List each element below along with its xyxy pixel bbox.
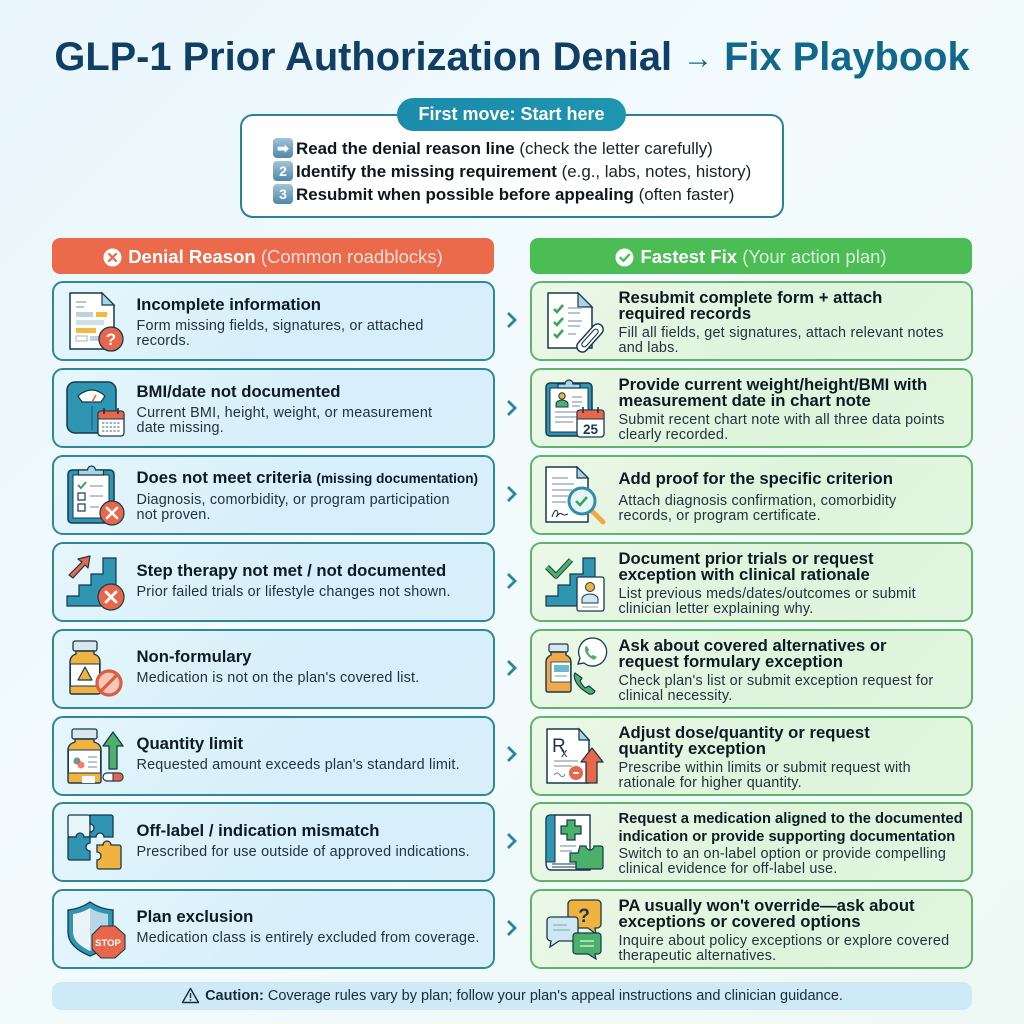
text: Non-formulary: [136, 647, 251, 666]
panel: denial does not meet criteria: [52, 455, 494, 535]
text: Current BMI, height, weight, or measurement: [136, 404, 432, 420]
text: Requested amount exceeds plan's standard limit.: [136, 757, 460, 773]
text: clinical necessity.: [618, 688, 732, 704]
text: Check plan's list or submit exception request for: [618, 672, 933, 688]
arrow 6: [507, 746, 517, 762]
text: clinical evidence for off-label use.: [618, 861, 837, 877]
text: [136, 647, 419, 686]
panel: denial incomplete information: [52, 281, 494, 361]
text: [136, 382, 432, 436]
text: Ask about covered alternatives or: [618, 636, 887, 654]
text: therapeutic alternatives.: [618, 948, 776, 964]
first move pill heading: [397, 98, 626, 131]
icon: shield with stop sign: STOP: [95, 938, 121, 948]
icon: speech bubbles: ?: [578, 906, 589, 926]
icon: form with question mark: [69, 292, 124, 352]
panel: denial BMI/date: [52, 368, 494, 448]
icon: form with question mark: ?: [105, 330, 116, 349]
icon: prescription with arrow: R: [552, 736, 565, 756]
text: [136, 468, 478, 523]
icon: speech bubbles: [530, 888, 614, 968]
heading: denial reason: Denial Reason (Common roadblocks): [128, 246, 443, 267]
panel: denial step therapy: [52, 542, 494, 622]
text: Off-label / indication mismatch: [136, 820, 379, 840]
panel: first move: ➡: [277, 140, 289, 156]
text: Plan exclusion: [136, 907, 253, 926]
panel: fix adjust dose: [530, 716, 972, 796]
panel: fix document trials: [530, 542, 972, 622]
caution bar: Caution: Coverage rules vary by plan; follow your plan's appeal instructions and clinician guidance.: [205, 988, 843, 1004]
text: [618, 549, 916, 617]
text: Does not meet criteria (missing documentation): [136, 468, 478, 487]
text: Medication class is entirely excluded from coverage.: [136, 930, 480, 946]
panel: fix covered alternatives: [530, 628, 972, 708]
icon: chart clipboard with calendar 25: 25: [582, 422, 598, 437]
text: Submit recent chart note with all three data points: [618, 412, 945, 428]
icon: signed document with magnifier: [545, 466, 606, 524]
text: [618, 636, 933, 704]
title: GLP-1 Prior Authorization Denial → Fix Playbook: [54, 35, 970, 79]
heading: denial reason: [52, 238, 494, 274]
text: Medication is not on the plan's covered list.: [136, 670, 419, 686]
text: not proven.: [136, 507, 211, 523]
heading: fastest fix: [530, 238, 972, 274]
icon: checklist with paperclip: [547, 292, 604, 353]
text: measurement date in chart note: [618, 391, 871, 410]
text: Add proof for the specific criterion: [618, 468, 893, 488]
icon: bottle with chat and phone: [545, 637, 608, 695]
step 1: Read the denial reason line (check the letter carefully): [296, 139, 713, 158]
text: [136, 560, 451, 600]
arrow 3: [507, 486, 517, 502]
panel: denial non-formulary: [52, 628, 494, 708]
text: [618, 468, 896, 524]
text: Fill all fields, get signatures, attach relevant notes: [618, 325, 944, 341]
text: List previous meds/dates/outcomes or submit: [618, 586, 916, 602]
icon: bottle with prohibit sign: [69, 640, 123, 697]
text: records, or program certificate.: [618, 508, 821, 524]
panel: fix PA won't override: [530, 888, 972, 968]
text: request formulary exception: [618, 652, 843, 670]
arrow 5: [507, 660, 517, 676]
text: [618, 722, 911, 790]
icon: scale and calendar: [66, 381, 125, 437]
text: Quantity limit: [136, 734, 243, 753]
text: required records: [618, 304, 751, 323]
panel: first move: 3: [279, 186, 287, 202]
step 3: Resubmit when possible before appealing (often faster): [296, 185, 734, 204]
text: Provide current weight/height/BMI with: [618, 375, 927, 394]
text: [136, 294, 424, 348]
icon: stairs with arrow and cross: [66, 555, 125, 611]
text: clearly recorded.: [618, 427, 728, 443]
panel: fix add proof: [530, 455, 972, 535]
text: Prior failed trials or lifestyle changes not shown.: [136, 584, 451, 600]
text: PA usually won't override—ask about: [618, 896, 915, 914]
text: BMI/date not documented: [136, 382, 340, 400]
text: Form missing fields, signatures, or attached: [136, 318, 424, 334]
arrow 1: [507, 312, 517, 328]
text: [618, 375, 945, 443]
icon: chart clipboard with calendar 25: [545, 379, 605, 438]
arrow 4: [507, 573, 517, 589]
text: [136, 820, 470, 860]
icon: medical book with puzzle piece: [530, 802, 614, 882]
step 2: Identify the missing requirement (e.g., labs, notes, history): [296, 162, 751, 181]
caution bar: [52, 982, 972, 1010]
icon: bottle with up arrow and pill: [67, 728, 124, 784]
arrow 7: [507, 833, 517, 849]
icon: prescription with arrow: x: [560, 744, 568, 760]
text: Request a medication aligned to the documented: [618, 811, 963, 827]
text: Resubmit complete form + attach: [618, 288, 882, 307]
panel: denial quantity limit: [52, 716, 494, 796]
text: [136, 907, 480, 946]
panel: denial off-label: [52, 802, 494, 882]
text: Attach diagnosis confirmation, comorbidity: [618, 492, 896, 508]
text: [618, 890, 976, 970]
panel: first move: 2: [279, 163, 287, 179]
text: Prescribe within limits or submit request with: [618, 760, 911, 776]
panel: first move: [240, 114, 784, 218]
text: rationale for higher quantity.: [618, 774, 802, 790]
text: [618, 288, 944, 356]
text: and labs.: [618, 340, 679, 356]
first move pill heading: First move: Start here: [418, 104, 605, 124]
text: Adjust dose/quantity or request: [618, 722, 870, 742]
heading: fastest fix: Fastest Fix (Your action plan): [640, 246, 887, 267]
icon: shield with stop sign: [67, 901, 126, 958]
text: quantity exception: [618, 738, 766, 758]
arrow 2: [507, 400, 517, 416]
icon: puzzle pieces: [67, 814, 122, 870]
text: indication or provide supporting documentation: [618, 828, 955, 844]
text: exception with clinical rationale: [618, 565, 870, 584]
panel: fix request medication: [530, 802, 972, 882]
text: exceptions or covered options: [618, 912, 861, 930]
arrow 8: [507, 920, 517, 936]
icon: clipboard with cross: [67, 465, 125, 526]
text: [618, 804, 976, 884]
text: clinician letter explaining why.: [618, 601, 813, 617]
icon: prescription with arrow: [546, 728, 604, 784]
panel: fix provide weight: [530, 368, 972, 448]
text: Prescribed for use outside of approved indications.: [136, 844, 470, 860]
text: Step therapy not met / not documented: [136, 560, 446, 580]
text: Diagnosis, comorbidity, or program participation: [136, 492, 450, 508]
text: Inquire about policy exceptions or explore covered: [618, 932, 949, 948]
text: [136, 734, 460, 773]
text: records.: [136, 332, 190, 348]
text: Incomplete information: [136, 294, 321, 314]
panel: denial plan exclusion: [52, 888, 494, 968]
panel: fix resubmit: [530, 281, 972, 361]
text: Document prior trials or request: [618, 549, 874, 568]
text: date missing.: [136, 420, 224, 436]
text: Switch to an on-label option or provide compelling: [618, 846, 946, 862]
icon: stairs with check and clinician card: [545, 557, 605, 612]
